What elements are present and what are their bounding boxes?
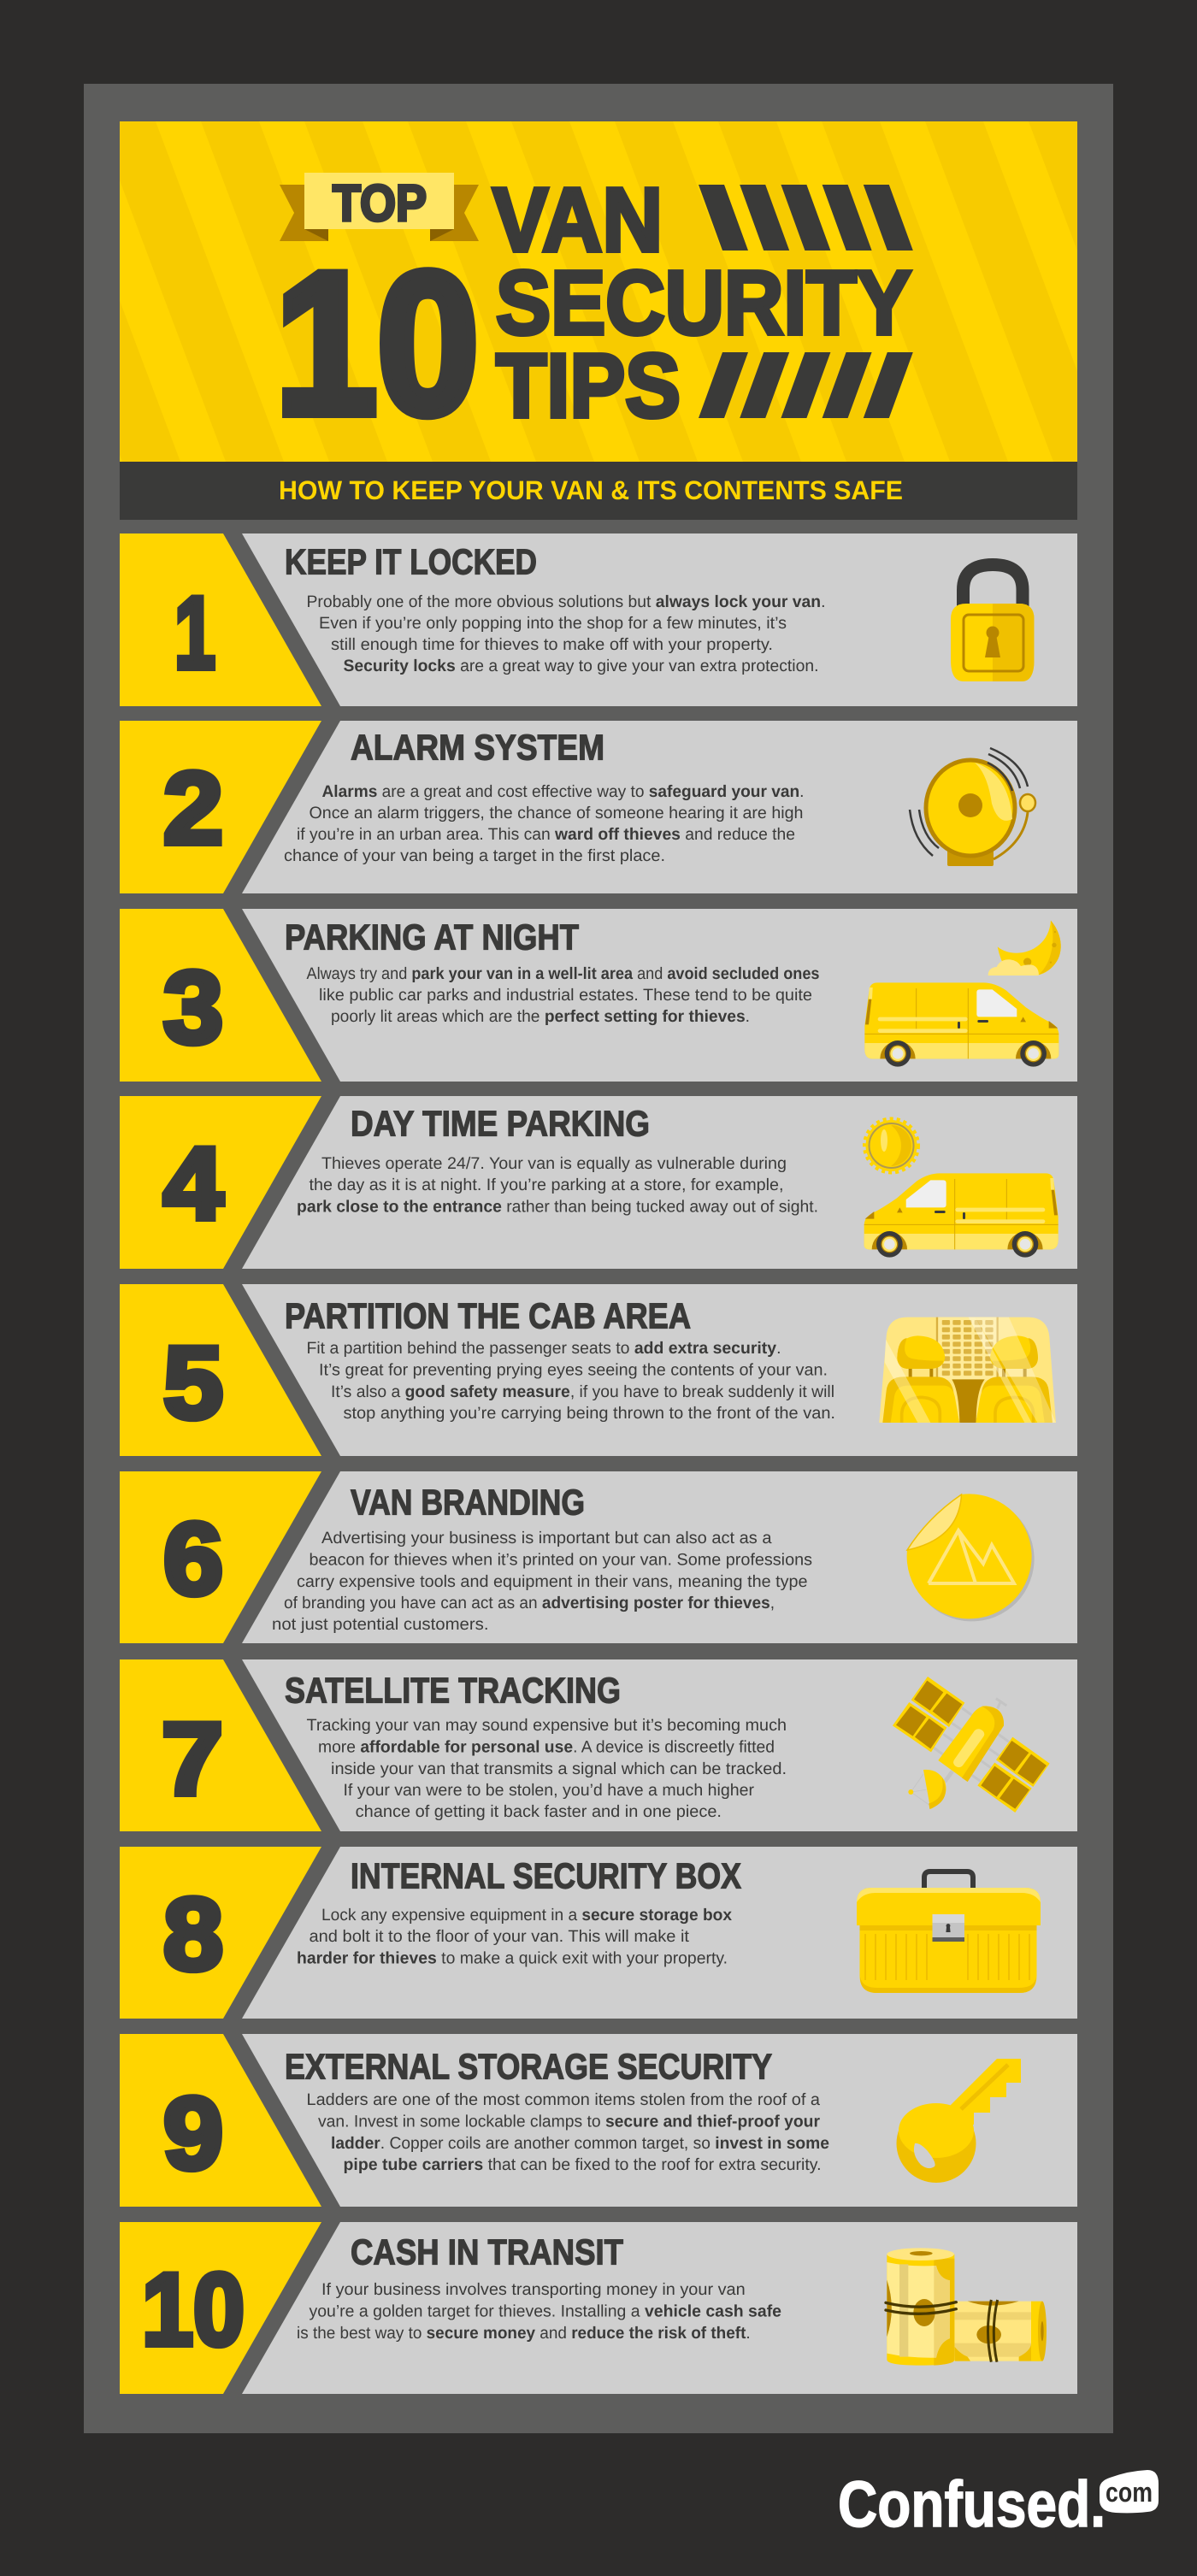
moon — [988, 921, 1061, 976]
grey frame — [84, 84, 1113, 2433]
number block 10 — [120, 2222, 321, 2394]
logo com: com — [1106, 2477, 1153, 2508]
body text 2: Once an alarm triggers, the chance of someone hearing it are high — [310, 804, 804, 822]
content panel 7 — [242, 1659, 1077, 1831]
content panel 5 — [242, 1284, 1077, 1456]
subtitle bar — [120, 462, 1077, 520]
content panel 10 — [242, 2222, 1077, 2394]
number block 3 — [120, 909, 321, 1082]
logo wordmark: Confused. — [838, 2468, 1106, 2541]
body text 10: If your business involves transporting money in your van — [321, 2280, 746, 2299]
icon: van in daytime — [864, 1173, 1058, 1258]
icon: alarm bell — [910, 748, 1035, 866]
tip 9 panel — [120, 2034, 1077, 2207]
content panel 4 — [242, 1096, 1077, 1269]
number block 8 — [120, 1847, 321, 2019]
heading 1: KEEP IT LOCKED — [285, 542, 537, 581]
title: VAN: VAN — [492, 169, 663, 270]
body text 5 — [306, 1339, 835, 1423]
body text 5: stop anything you’re carrying being thrown to the front of the van. — [344, 1404, 835, 1423]
body text 7: inside your van that transmits a signal which can be tracked. — [331, 1760, 787, 1778]
heading 7: SATELLITE TRACKING — [285, 1671, 621, 1710]
icon: sun — [865, 1119, 918, 1172]
title number 10: 10 — [275, 231, 479, 457]
tip 2 panel — [120, 721, 1077, 893]
body text 4: park close to the entrance rather than being tucked away out of sight. — [297, 1197, 818, 1216]
body text 7 — [306, 1716, 787, 1821]
tip 7 panel — [120, 1659, 1077, 1831]
body text 6: carry expensive tools and equipment in their vans, meaning the type — [297, 1572, 807, 1591]
number 7: 7 — [162, 1701, 223, 1816]
body text 9: pipe tube carriers that can be fixed to the roof for extra security. — [344, 2155, 821, 2174]
body text 6: of branding you have can act as an advertising poster for thieves, — [284, 1594, 775, 1612]
ribbon: TOP — [280, 173, 479, 241]
content panel 6 — [242, 1471, 1077, 1643]
number 8: 8 — [163, 1877, 223, 1992]
icon: peeling sticker — [907, 1494, 1035, 1621]
hazard bars top — [699, 185, 913, 251]
body text 3: Always try and park your van in a well-lit area and avoid secluded ones — [306, 964, 820, 983]
icon: van at night — [864, 921, 1061, 1067]
heading 10: CASH IN TRANSIT — [351, 2231, 623, 2272]
number block 6 — [120, 1471, 321, 1643]
body text 9: ladder. Copper coils are another common target, so invest in some — [331, 2134, 829, 2153]
heading 9: EXTERNAL STORAGE SECURITY — [285, 2047, 772, 2086]
tip 3 panel — [120, 909, 1077, 1082]
number block 4 — [120, 1096, 321, 1269]
content panel 8 — [242, 1847, 1077, 2019]
heading 5: PARTITION THE CAB AREA — [285, 1296, 691, 1335]
body text 5: It’s great for preventing prying eyes seeing the contents of your van. — [319, 1361, 828, 1380]
body text 6: Advertising your business is important but can also act as a — [321, 1529, 772, 1547]
body text 7: more affordable for personal use. A device is discreetly fitted — [318, 1737, 775, 1756]
body text 1: Probably one of the more obvious solutions but always lock your van. — [306, 592, 826, 611]
icon: cab partition — [879, 1317, 1056, 1423]
number block 9 — [120, 2034, 321, 2207]
icon: rolled cash — [886, 2248, 1047, 2366]
number 9: 9 — [163, 2076, 223, 2190]
body text 6: beacon for thieves when it’s printed on your van. Some professions — [310, 1551, 812, 1570]
confused.com logo — [838, 2468, 1159, 2541]
body text 7: If your van were to be stolen, you’d have a much higher — [344, 1781, 754, 1800]
title: SECURITY: SECURITY — [496, 253, 911, 354]
body text 9 — [306, 2090, 829, 2174]
icon: padlock — [951, 564, 1035, 681]
body text 4: Thieves operate 24/7. Your van is equally as vulnerable during — [321, 1154, 787, 1173]
number 5: 5 — [163, 1325, 223, 1440]
body text 1: Even if you’re only popping into the shop for a few minutes, it’s — [319, 614, 787, 633]
body text 4 — [297, 1154, 818, 1216]
tip 1 panel — [120, 533, 1077, 706]
body text 8: harder for thieves to make a quick exit with your property. — [297, 1949, 728, 1968]
tip 10 panel — [120, 2222, 1077, 2394]
logo bubble — [1100, 2470, 1159, 2513]
body text 8 — [297, 1906, 732, 1968]
content panel 1 — [242, 533, 1077, 706]
number 4: 4 — [163, 1127, 223, 1241]
body text 3: poorly lit areas which are the perfect setting for thieves. — [331, 1007, 750, 1026]
body text 10 — [297, 2280, 781, 2343]
body text 9: Ladders are one of the most common items stolen from the roof of a — [306, 2090, 820, 2109]
body text 1 — [306, 592, 826, 675]
number 2: 2 — [163, 751, 223, 865]
content panel 2 — [242, 721, 1077, 893]
content panel 3 — [242, 909, 1077, 1082]
body text 2: if you’re in an urban area. This can ward off thieves and reduce the — [297, 825, 795, 844]
body text 4: the day as it is at night. If you’re parking at a store, for example, — [310, 1176, 783, 1194]
body text 10: you’re a golden target for thieves. Installing a vehicle cash safe — [310, 2302, 781, 2320]
body text 5: It’s also a good safety measure, if you have to break suddenly it will — [331, 1382, 834, 1401]
tip 5 panel — [120, 1284, 1077, 1456]
body text 2 — [284, 782, 804, 865]
icon: security box — [857, 1872, 1041, 1993]
body text 2: chance of your van being a target in the first place. — [284, 846, 665, 865]
tip 4 panel — [120, 1096, 1077, 1269]
body text 8: and bolt it to the floor of your van. This will make it — [310, 1927, 690, 1946]
content panel 9 — [242, 2034, 1077, 2207]
icon: satellite — [893, 1677, 1050, 1813]
body text 1: Security locks are a great way to give your van extra protection. — [344, 657, 819, 675]
body text 8: Lock any expensive equipment in a secure storage box — [321, 1906, 732, 1925]
heading 2: ALARM SYSTEM — [351, 727, 604, 768]
number 10: 10 — [142, 2252, 245, 2367]
number block 7 — [120, 1659, 321, 1831]
body text 7: Tracking your van may sound expensive but it’s becoming much — [306, 1716, 787, 1735]
icon: key — [896, 2059, 1021, 2183]
number 3: 3 — [163, 951, 223, 1065]
number block 5 — [120, 1284, 321, 1456]
body text 2: Alarms are a great and cost effective way to safeguard your van. — [321, 782, 804, 801]
number 1: 1 — [174, 576, 215, 691]
tip 6 panel — [120, 1471, 1077, 1643]
body text 9: van. Invest in some lockable clamps to secure and thief-proof your — [318, 2112, 820, 2131]
body text 6 — [272, 1529, 812, 1634]
body text 3: like public car parks and industrial estates. These tend to be quite — [319, 986, 812, 1005]
body text 7: chance of getting it back faster and in one piece. — [356, 1802, 722, 1821]
van — [864, 982, 1058, 1067]
ribbon: TOP: TOP — [333, 174, 427, 232]
tip 8 panel — [120, 1847, 1077, 2019]
header stripes background — [120, 121, 1077, 462]
body text 5: Fit a partition behind the passenger seats to add extra security. — [306, 1339, 781, 1358]
heading 4: DAY TIME PARKING — [351, 1103, 650, 1144]
subtitle: HOW TO KEEP YOUR VAN & ITS CONTENTS SAFE — [279, 475, 903, 505]
heading 6: VAN BRANDING — [351, 1483, 585, 1522]
body text 10: is the best way to secure money and reduce the risk of theft. — [297, 2324, 751, 2343]
hazard bars bottom — [699, 352, 913, 418]
body text 1: still enough time for thieves to make off with your property. — [331, 635, 773, 654]
heading 8: INTERNAL SECURITY BOX — [351, 1855, 741, 1896]
body text 6: not just potential customers. — [272, 1615, 489, 1634]
number 6: 6 — [163, 1501, 223, 1616]
header panel — [120, 121, 1077, 520]
number block 2 — [120, 721, 321, 893]
heading 3: PARKING AT NIGHT — [285, 917, 579, 958]
title: TIPS: TIPS — [496, 335, 681, 436]
body text 3 — [306, 964, 820, 1026]
number block 1 — [120, 533, 321, 706]
